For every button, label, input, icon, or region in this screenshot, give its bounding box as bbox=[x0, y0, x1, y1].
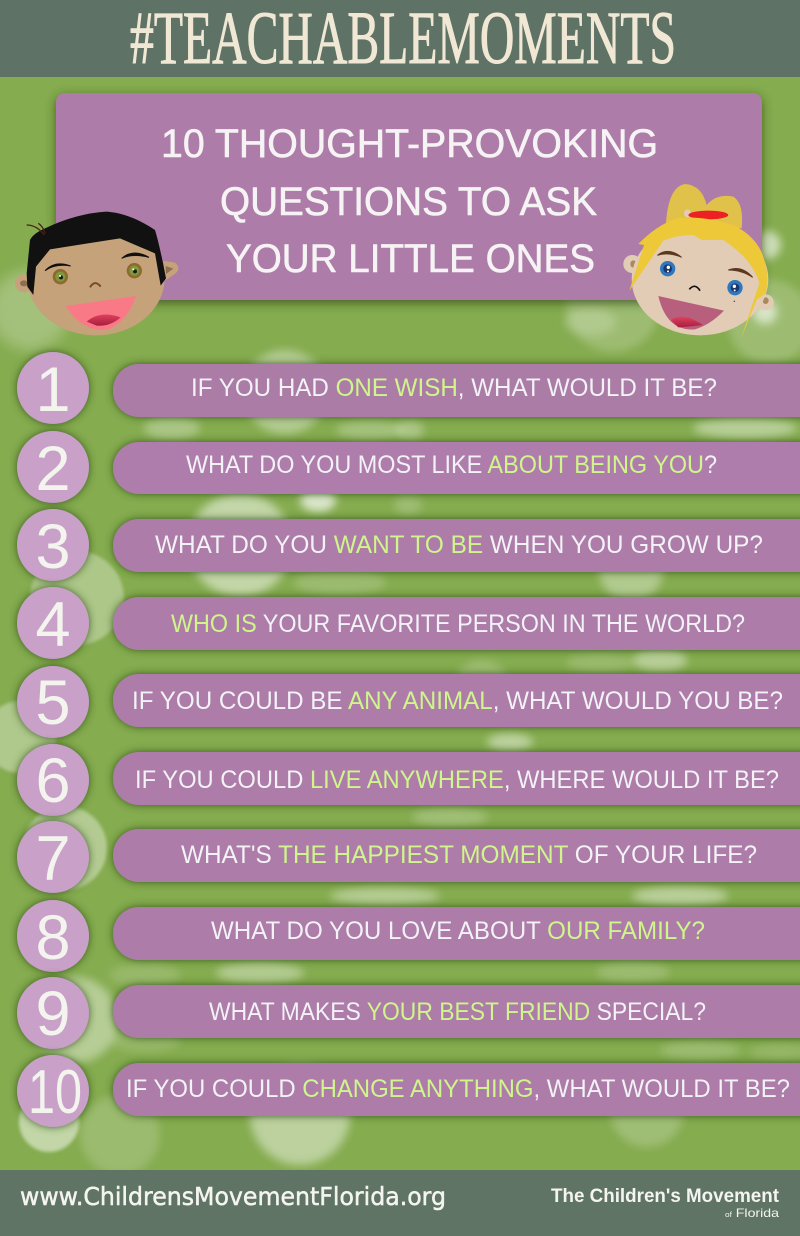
question 2: 2 bbox=[35, 434, 71, 504]
question 10: 10 bbox=[28, 1058, 82, 1127]
question 8: WHAT DO YOU LOVE ABOUT OUR FAMILY? bbox=[211, 917, 705, 945]
question 2: WHAT DO YOU MOST LIKE ABOUT BEING YOU? bbox=[186, 451, 717, 479]
footer logo: The Children's Movement of Florida: The Children's Movement bbox=[551, 1186, 780, 1207]
question 9: 9 bbox=[35, 979, 71, 1049]
footer logo: The Children's Movement of Florida: of Florida bbox=[725, 1206, 779, 1220]
footer band bbox=[0, 1170, 800, 1236]
heading text: YOUR LITTLE ONES bbox=[226, 237, 595, 281]
question 3 bbox=[17, 509, 800, 582]
question 6 bbox=[17, 744, 800, 816]
heading text: QUESTIONS TO ASK bbox=[220, 180, 597, 224]
question 1: IF YOU HAD ONE WISH, WHAT WOULD IT BE? bbox=[191, 374, 717, 402]
heading text bbox=[161, 122, 658, 281]
header band bbox=[0, 0, 800, 80]
question 4: WHO IS YOUR FAVORITE PERSON IN THE WORLD? bbox=[171, 610, 745, 638]
heading text: 10 THOUGHT-PROVOKING bbox=[161, 122, 658, 166]
question 4: 4 bbox=[35, 590, 71, 660]
question 8 bbox=[17, 900, 800, 973]
question 1: 1 bbox=[35, 355, 71, 425]
question 10: IF YOU COULD CHANGE ANYTHING, WHAT WOULD IT BE? bbox=[126, 1075, 790, 1103]
question 5: 5 bbox=[35, 668, 71, 738]
question 6: IF YOU COULD LIVE ANYWHERE, WHERE WOULD IT BE? bbox=[135, 766, 779, 794]
question 7: 7 bbox=[35, 824, 71, 894]
question 4 bbox=[17, 587, 800, 660]
icon: boy face bbox=[15, 212, 178, 335]
question 5: IF YOU COULD BE ANY ANIMAL, WHAT WOULD YOU BE? bbox=[132, 687, 783, 715]
question 7: WHAT'S THE HAPPIEST MOMENT OF YOUR LIFE? bbox=[181, 841, 757, 869]
question 9 bbox=[17, 977, 800, 1049]
question 2 bbox=[17, 431, 800, 504]
question 10 bbox=[17, 1055, 800, 1127]
question 6: 6 bbox=[35, 746, 71, 816]
question 7 bbox=[17, 821, 800, 894]
footer url: www.ChildrensMovementFlorida.org bbox=[20, 1182, 446, 1211]
question 5 bbox=[17, 666, 800, 738]
question 1 bbox=[17, 352, 800, 425]
question 8: 8 bbox=[35, 903, 71, 973]
panel: heading bbox=[56, 93, 762, 300]
icon: girl face bbox=[623, 184, 774, 339]
question 3: 3 bbox=[35, 512, 71, 582]
question 3: WHAT DO YOU WANT TO BE WHEN YOU GROW UP? bbox=[155, 531, 763, 559]
question 9: WHAT MAKES YOUR BEST FRIEND SPECIAL? bbox=[209, 998, 706, 1026]
footer logo: The Children's Movement of Florida bbox=[551, 1186, 780, 1220]
